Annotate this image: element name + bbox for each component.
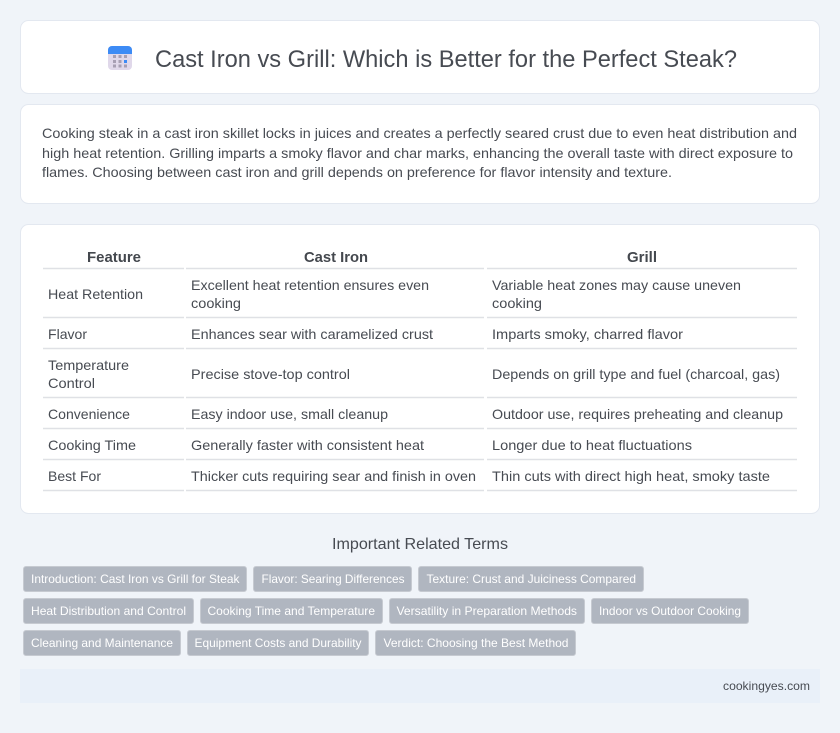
panel: comparison table (20, 224, 820, 514)
table header row: Cast Iron (304, 249, 368, 266)
title: Cast Iron vs Grill: Which is Better for the Perfect Steak? (155, 46, 737, 73)
row: convenience: Convenience (48, 406, 130, 422)
row: flavor: Imparts smoky, charred flavor (492, 326, 683, 342)
tag (24, 630, 180, 656)
intro text: flames. Choosing between cast iron and grill depends on preference for flavor intensity and texture. (42, 164, 672, 180)
panel: introduction (20, 104, 820, 204)
row: convenience: Easy indoor use, small cleanup (191, 406, 388, 422)
table header row: Grill (627, 249, 657, 266)
tag (592, 598, 748, 624)
intro text: high heat retention. Grilling imparts a smoky flavor and char marks, enhancing the overall taste with direct exposure to (42, 145, 793, 161)
intro text: Cooking steak in a cast iron skillet locks in juices and creates a perfectly seared crust due to even heat distribution and (42, 125, 797, 141)
tag: Introduction: Cast Iron vs Grill for Steak (31, 572, 240, 586)
panel: title header (20, 20, 820, 94)
row: flavor: Enhances sear with caramelized crust (191, 326, 433, 342)
icon: calendar (108, 46, 132, 70)
tag: Indoor vs Outdoor Cooking (599, 604, 741, 618)
row: best for: Thin cuts with direct high heat, smoky taste (492, 468, 770, 484)
row: temperature control: Precise stove-top control (191, 366, 350, 382)
tag: Cooking Time and Temperature (208, 604, 375, 618)
row: heat retention: Excellent heat retention ensures even (191, 277, 429, 293)
table header row: Feature (87, 249, 141, 266)
row: temperature control: Control (48, 375, 95, 391)
row: best for: Best For (48, 468, 101, 484)
row: heat retention: cooking (492, 295, 542, 311)
row: flavor: Flavor (48, 326, 87, 342)
footer (20, 669, 820, 703)
intro text (42, 125, 797, 180)
tag (24, 598, 194, 624)
row: cooking time: Cooking Time (48, 437, 136, 453)
row: cooking time: Longer due to heat fluctuations (492, 437, 692, 453)
row: flavor (48, 326, 683, 342)
row: temperature control (48, 357, 780, 391)
tag: Cleaning and Maintenance (31, 636, 173, 650)
tag (200, 598, 382, 624)
footer source text: cookingyes.com (723, 679, 810, 693)
row: best for: Thicker cuts requiring sear and finish in oven (191, 468, 476, 484)
tag (188, 630, 368, 656)
tag: Texture: Crust and Juiciness Compared (426, 572, 636, 586)
row: heat retention: Heat Retention (48, 286, 143, 302)
row: convenience: Outdoor use, requires preheating and cleanup (492, 406, 783, 422)
tag: Flavor: Searing Differences (262, 572, 404, 586)
tag: Verdict: Choosing the Best Method (384, 636, 568, 650)
related terms tags (24, 566, 748, 656)
row: convenience (48, 406, 783, 422)
tag: Heat Distribution and Control (31, 604, 186, 618)
heading: related terms: Important Related Terms (332, 536, 508, 553)
row: best for (48, 468, 770, 484)
row: cooking time (48, 437, 692, 453)
row: temperature control: Temperature (48, 357, 129, 373)
row: heat retention (48, 277, 741, 311)
row: temperature control: Depends on grill type and fuel (charcoal, gas) (492, 366, 780, 382)
tag: Versatility in Preparation Methods (396, 604, 577, 618)
row: heat retention: Variable heat zones may cause uneven (492, 277, 741, 293)
tag (254, 566, 412, 592)
table header row (87, 249, 657, 266)
tag: Equipment Costs and Durability (194, 636, 362, 650)
tag (24, 566, 246, 592)
row: cooking time: Generally faster with consistent heat (191, 437, 424, 453)
tag (418, 566, 644, 592)
tag (376, 630, 576, 656)
row: heat retention: cooking (191, 295, 241, 311)
tag (390, 598, 584, 624)
